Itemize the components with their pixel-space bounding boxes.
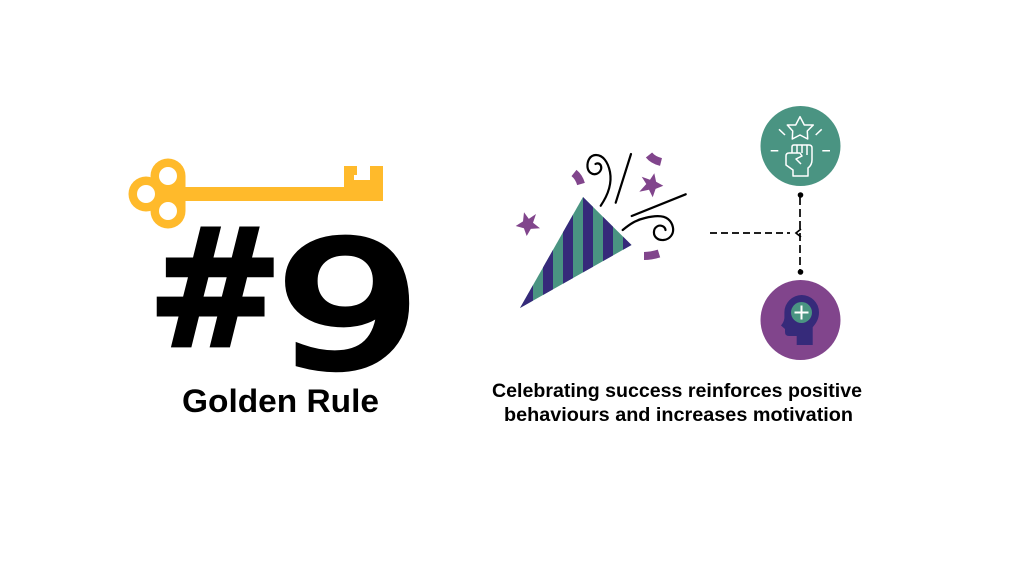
star — [787, 117, 813, 139]
big heading: #9 — [147, 193, 420, 407]
illustration: party popper — [515, 154, 686, 315]
caption text — [492, 381, 862, 426]
icon: head with plus in purple circle — [760, 280, 840, 360]
popper cone — [520, 197, 632, 308]
rays — [771, 129, 830, 151]
caption text: Celebrating success reinforces positive — [492, 381, 862, 402]
infographic canvas — [128, 106, 862, 421]
icon: golden key — [128, 158, 383, 228]
streamers — [587, 154, 686, 240]
star left — [516, 212, 540, 236]
star right — [639, 173, 663, 197]
connector: dashed branch — [710, 192, 803, 275]
caption text: behaviours and increases motivation — [504, 405, 853, 426]
big heading: #9: # — [147, 193, 283, 385]
big heading: #9: 9 — [276, 207, 420, 407]
heading: Golden Rule: Golden Rule — [182, 383, 379, 419]
icon: fist and star in teal circle — [760, 106, 840, 186]
confetti pieces — [574, 155, 661, 256]
fist — [786, 145, 812, 176]
